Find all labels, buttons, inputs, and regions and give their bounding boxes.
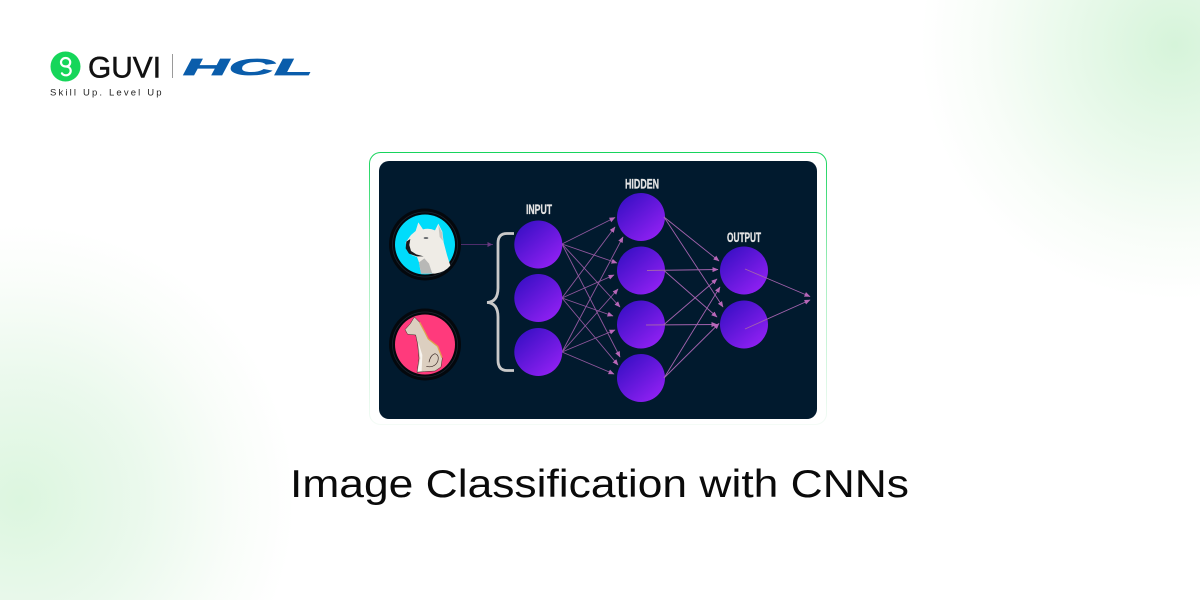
label: output: OUTPUT (727, 230, 761, 246)
tagline: Skill Up. Level Up (50, 88, 162, 98)
background glow: top right (900, 0, 1200, 310)
hidden layer (617, 176, 665, 402)
panel: neural network diagram (379, 161, 817, 419)
arrow: images to input layer (461, 244, 493, 246)
image frame (370, 152, 826, 424)
GUVI wordmark: GUVI (88, 52, 161, 84)
label: input: INPUT (526, 202, 552, 218)
output layer (720, 230, 768, 348)
logo: GUVI and HCL (50, 52, 313, 98)
connections: hidden to output (646, 217, 810, 378)
title: Image Classification with CNNs (290, 463, 909, 506)
icon: GUVI green badge (50, 52, 80, 82)
background glow: bottom left (0, 210, 310, 600)
label: hidden: HIDDEN (625, 176, 659, 192)
connections: input to hidden (562, 218, 623, 374)
logo divider (172, 54, 173, 78)
HCL wordmark: HCL (183, 54, 313, 81)
input layer (514, 202, 562, 376)
icon: dog in cyan circle (389, 208, 461, 280)
panel background (379, 161, 817, 419)
brace: input grouping (487, 234, 514, 370)
icon: cat in pink circle (389, 308, 461, 380)
